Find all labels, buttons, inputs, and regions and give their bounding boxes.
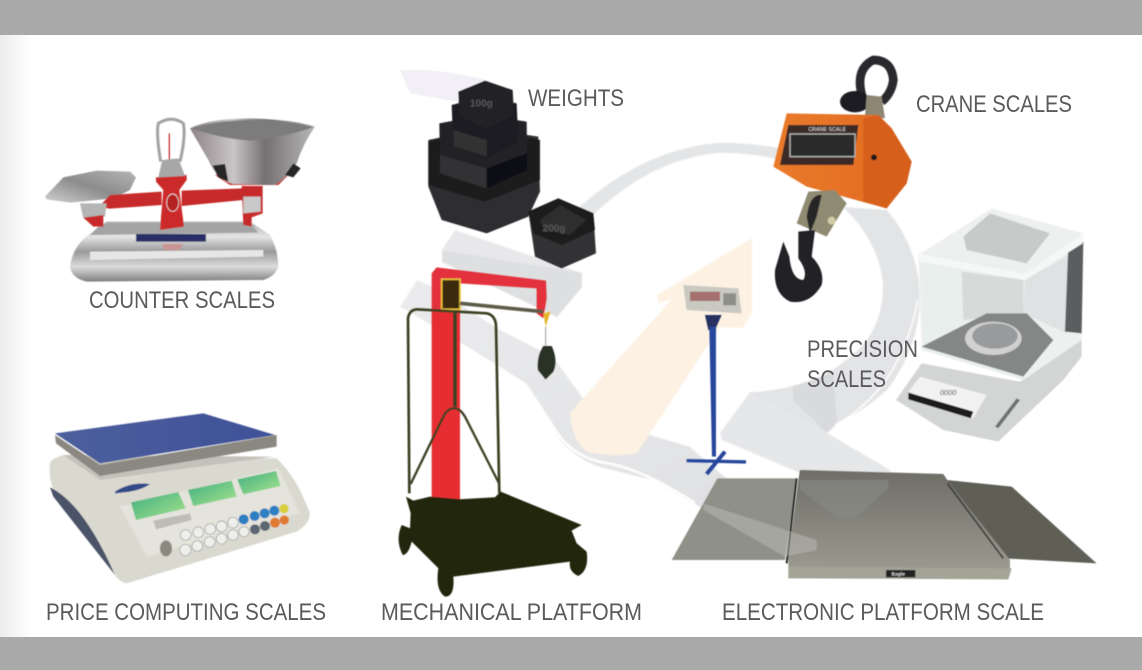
label: electronic platform scale: ELECTRONIC PLATFORM SCALE xyxy=(722,599,1044,626)
product: weights: 100g xyxy=(470,99,493,110)
label: mechanical platform: MECHANICAL PLATFORM xyxy=(381,599,642,626)
label: precision scales: PRECISION xyxy=(807,336,918,363)
peach arrow xyxy=(570,238,752,455)
label: precision scales xyxy=(807,336,918,393)
product: precision balance xyxy=(896,208,1083,442)
circular arrow ribbon background xyxy=(400,143,920,530)
label: price computing scales: PRICE COMPUTING SCALES xyxy=(46,599,326,626)
label: precision scales: SCALES xyxy=(807,366,886,393)
product: electronic platform scale xyxy=(672,470,1097,579)
product: crane scale: CRANE SCALE xyxy=(808,127,846,133)
product: weights xyxy=(400,70,596,268)
top grey band xyxy=(0,0,1142,35)
product: mechanical platform scale xyxy=(399,267,587,597)
product: weights: 200g xyxy=(543,224,565,235)
left edge shading xyxy=(0,35,32,637)
product: electronic platform scale: Eagle xyxy=(892,572,905,578)
product: counter scale xyxy=(45,118,315,282)
product: electronic indicator on stand xyxy=(683,285,746,474)
label: counter scales: COUNTER SCALES xyxy=(89,287,275,314)
product: crane scale xyxy=(773,60,912,302)
label: weights: WEIGHTS xyxy=(528,85,624,112)
product: precision balance: 0000 xyxy=(940,388,957,397)
bottom grey band xyxy=(0,637,1142,670)
label: crane scales: CRANE SCALES xyxy=(916,91,1072,118)
product: price computing scale xyxy=(50,413,310,583)
